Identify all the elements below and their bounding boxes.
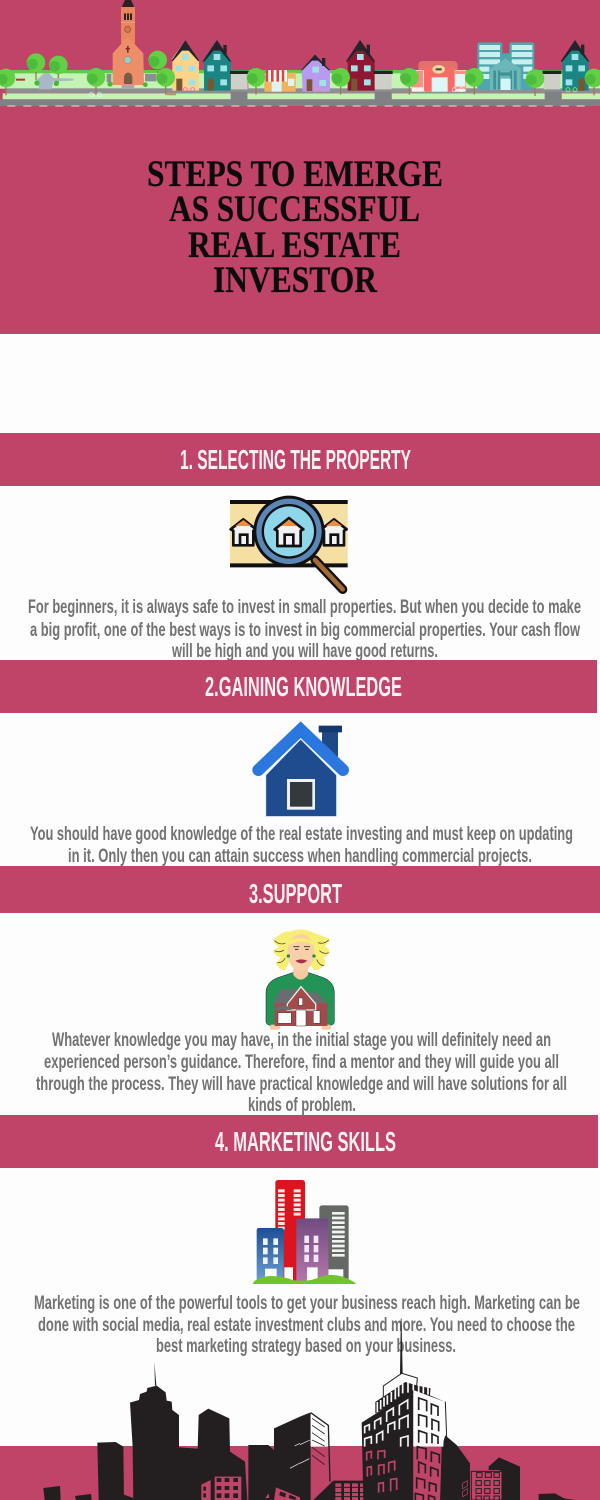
- section 4 heading band: 4. MARKETING SKILLS: [215, 1126, 396, 1157]
- title: AS SUCCESSFUL: [169, 189, 420, 230]
- section 2 heading band: [0, 660, 597, 713]
- text: section 3 body: [36, 1030, 567, 1116]
- text: section 4 body: [34, 1293, 580, 1357]
- icon: magnifying glass over houses: [230, 496, 348, 589]
- section 2 heading band: 2.GAINING KNOWLEDGE: [205, 671, 402, 702]
- section 3 heading band: 3.SUPPORT: [249, 878, 342, 909]
- skyline left half: [43, 1362, 300, 1500]
- icon: coloured city buildings: [253, 1180, 356, 1284]
- illustration: street scene with town buildings: [0, 0, 600, 106]
- text: section 4 body: best marketing strategy based on your business.: [156, 1336, 456, 1357]
- town left half: [0, 0, 300, 106]
- text: section 3 body: kinds of problem.: [248, 1095, 356, 1116]
- text: section 1 body: [28, 597, 581, 662]
- section 1 heading band: [0, 433, 600, 486]
- title: STEPS TO EMERGE: [147, 154, 443, 195]
- title: [147, 154, 443, 301]
- town right half: [300, 40, 600, 106]
- header banner background: [0, 0, 600, 334]
- icon: blue house: [258, 726, 343, 817]
- footer band with city skyline: [0, 1318, 600, 1500]
- section 1 heading band: 1. SELECTING THE PROPERTY: [180, 444, 411, 475]
- text: section 1 body: will be high and you will have good returns.: [171, 641, 438, 662]
- text: section 2 body: [30, 824, 573, 867]
- title: REAL ESTATE: [188, 225, 401, 266]
- title: INVESTOR: [213, 260, 378, 301]
- section 4 heading band: [0, 1115, 598, 1168]
- skyline right half: [300, 1318, 575, 1500]
- icon: woman holding a model house: [266, 930, 334, 1030]
- section 3 heading band: [0, 866, 600, 913]
